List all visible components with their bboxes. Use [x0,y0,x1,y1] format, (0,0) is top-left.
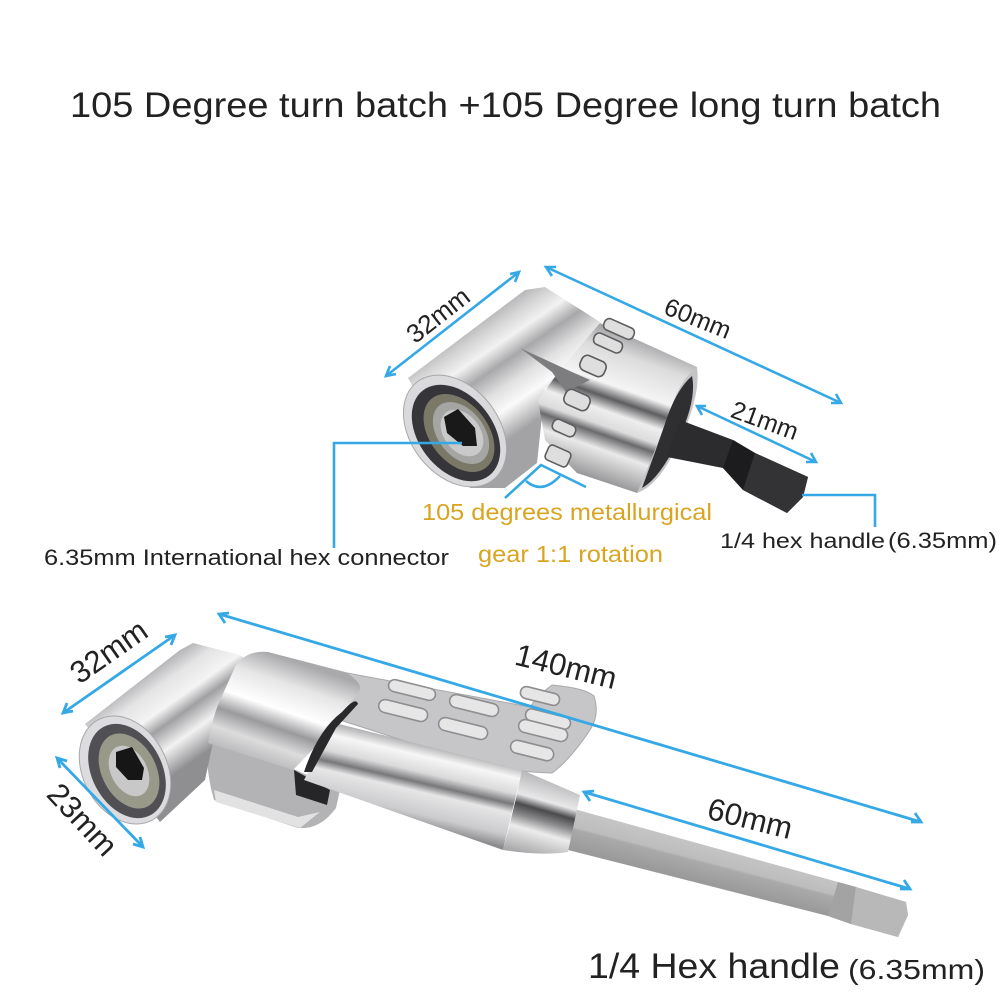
label: gold gear line 2: gear 1:1 rotation [478,541,663,567]
collar opening [637,367,698,493]
elbow [85,643,262,822]
collar opening [304,701,358,772]
hex shank long [560,807,908,937]
bearing [394,368,518,498]
label: 32mm long: 32mm [63,613,154,691]
collar cylinder [538,323,697,493]
angle mark 105 degrees [505,465,586,498]
elbow body [408,287,600,488]
arrow 140mm [219,613,921,822]
tool: long 105 degree adapter [61,643,908,937]
arrow 32mm long [63,635,175,713]
cone wedge [520,348,590,392]
dimension arrows: long tool [57,613,921,889]
label: 32mm top: 32mm [400,281,476,349]
arrow 23mm [57,758,143,847]
shaft nose [503,770,580,854]
label: gold gear line 1: 105 degrees metallurgical [422,499,712,525]
label: 140mm: 140mm [512,637,621,696]
front face ring [61,700,189,840]
label: hex handle small: 1/4 hex handle [720,530,885,553]
arrow 32mm [386,272,519,376]
slotted plate [331,670,596,773]
clip highlight [214,790,320,828]
label: hex handle size small: (6.35mm) [888,528,997,553]
lower clip [207,740,340,828]
arrow 60mm [546,267,841,403]
dimension arrows: short tool [334,267,875,548]
shaft [304,723,522,850]
label: 21mm: 21mm [727,396,802,446]
label: 23mm: 23mm [40,776,125,863]
hex socket [444,409,477,446]
tool: short 105 degree adapter [382,287,808,513]
label: 60mm long: 60mm [704,791,796,846]
label: international hex connector: 6.35mm International hex connector [44,545,449,570]
label: 6.35mm large: (6.35mm) [848,954,985,985]
leader: hex connector [334,443,462,548]
front face ring [382,355,528,507]
clip dark recess [294,770,330,805]
label: hex handle large: 1/4 Hex handle [588,947,840,986]
collar inner dark [642,376,693,488]
leader: hex handle [802,495,875,527]
bearing [73,710,181,832]
title: 105 Degree turn batch +105 Degree long turn batch [70,86,941,125]
label: 60mm top: 60mm [660,293,735,345]
arrow 21mm [697,406,816,462]
hex socket [116,747,144,780]
hex bit black [667,420,808,513]
plate slots [377,678,572,762]
arrow 60mm long [584,791,910,889]
gear teeth [544,317,636,468]
collar [208,652,360,770]
